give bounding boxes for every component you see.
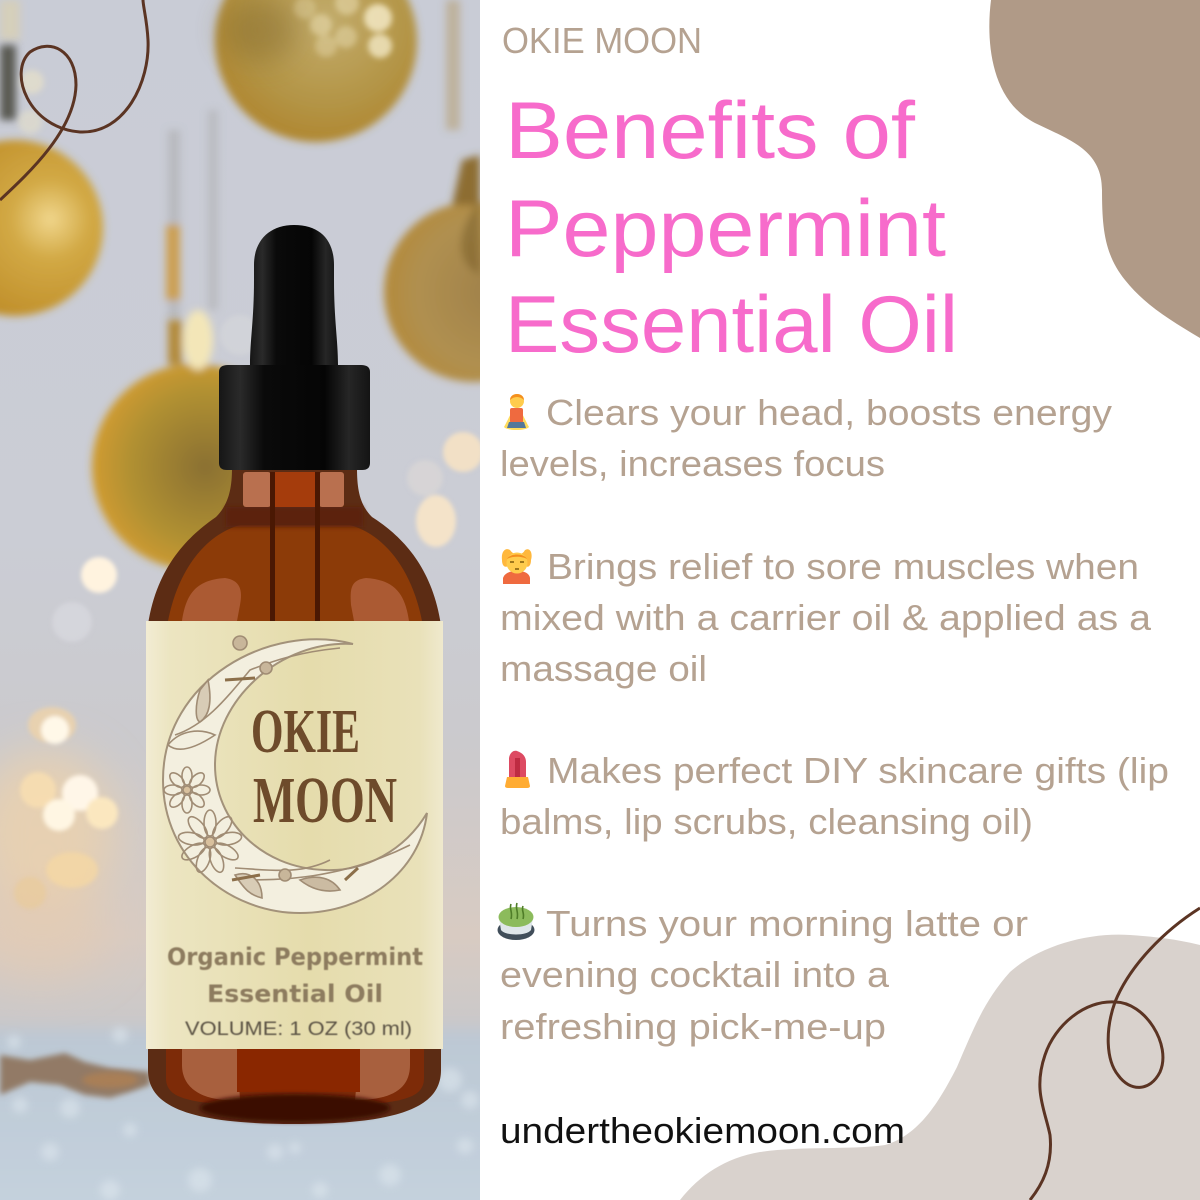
label product name: Essential Oil xyxy=(207,980,383,1008)
website url: undertheokiemoon.com xyxy=(500,1110,905,1151)
neck highlights xyxy=(243,472,271,507)
benefit: clears your head: levels, increases focus xyxy=(500,443,885,484)
benefit: clears your head xyxy=(500,392,1112,484)
blob: bottom right xyxy=(680,935,1200,1200)
benefit: sore muscles: Brings relief to sore muscles when xyxy=(547,546,1139,587)
dropper tube xyxy=(270,472,320,621)
blob: top right xyxy=(989,0,1200,338)
base interior xyxy=(166,1048,424,1106)
snow speckles xyxy=(7,1027,479,1200)
icon: meditating person xyxy=(504,394,529,430)
benefit: sore muscles: massage oil xyxy=(500,648,707,689)
benefit: sore muscles: mixed with a carrier oil & applied as a xyxy=(500,597,1152,638)
top ornament sparkles xyxy=(18,0,392,134)
benefit: sore muscles xyxy=(500,546,1152,689)
brand name: OKIE MOON xyxy=(502,20,702,61)
label brand: OKIE MOON xyxy=(251,698,397,837)
benefit: morning latte: refreshing pick-me-up xyxy=(500,1006,886,1047)
icon: matcha cup xyxy=(498,903,534,940)
bottle xyxy=(146,225,443,1124)
label brand: OKIE MOON: OKIE xyxy=(251,698,360,766)
benefit: DIY skincare gifts xyxy=(500,750,1169,842)
black collar xyxy=(219,365,370,470)
title: Benefits of xyxy=(505,86,916,176)
shoulder interior xyxy=(168,525,422,621)
title xyxy=(505,86,958,370)
gold ornaments xyxy=(0,0,480,572)
bokeh lights xyxy=(14,430,480,909)
label volume: VOLUME: 1 OZ (30 ml) xyxy=(185,1019,412,1040)
snowy ground xyxy=(0,1027,500,1200)
benefit: DIY skincare gifts: balms, lip scrubs, cleansing oil) xyxy=(500,801,1033,842)
label product name: Organic Peppermint xyxy=(167,943,423,971)
benefit: clears your head: Clears your head, boosts energy xyxy=(546,392,1112,433)
icon: person getting a massage xyxy=(502,549,532,584)
curly line: bottom right xyxy=(1030,908,1200,1200)
daisy flower upper xyxy=(164,767,210,813)
crescent moon illustration xyxy=(163,636,427,913)
bottle glass xyxy=(148,468,441,1124)
benefit: morning latte: evening cocktail into a xyxy=(500,954,890,995)
hanging strings xyxy=(0,0,460,320)
warm bokeh glow xyxy=(0,750,115,980)
panel: photo background with gold ornaments xyxy=(0,0,480,1200)
cream label xyxy=(146,621,443,1049)
brown crust xyxy=(0,1053,150,1098)
benefit: morning latte: Turns your morning latte or xyxy=(546,903,1028,944)
curly line: top left xyxy=(0,0,148,200)
shoulder highlights xyxy=(182,578,241,621)
benefit: DIY skincare gifts: Makes perfect DIY skincare gifts (lip xyxy=(547,750,1169,791)
icon: lipstick xyxy=(505,751,530,788)
benefit: morning latte xyxy=(498,903,1028,1047)
title: Peppermint xyxy=(505,184,946,274)
title: Essential Oil xyxy=(505,280,958,370)
label product name xyxy=(167,943,423,1008)
daisy flower lower xyxy=(177,810,243,874)
black dropper bulb xyxy=(250,225,338,365)
label brand: OKIE MOON: MOON xyxy=(253,764,397,837)
